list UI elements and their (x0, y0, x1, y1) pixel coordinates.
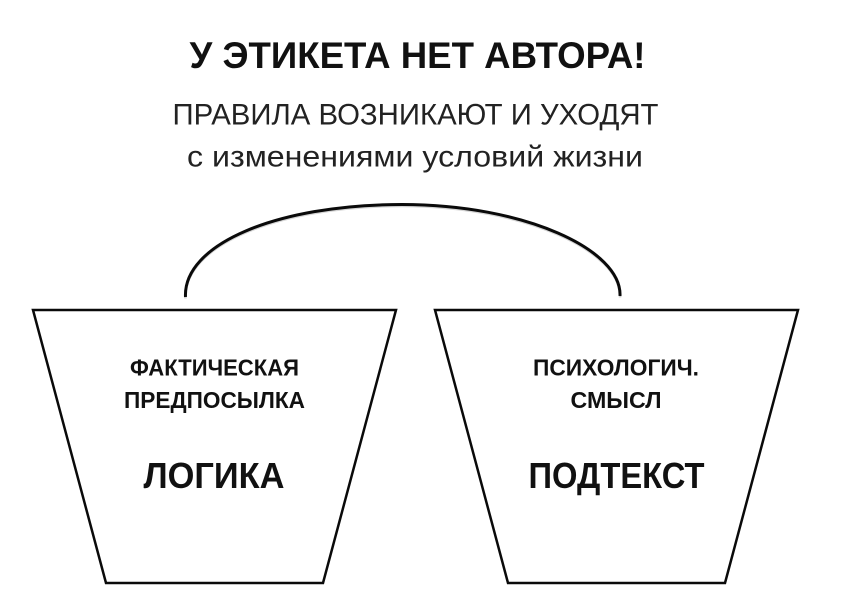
title: У ЭТИКЕТА НЕТ АВТОРА! (190, 34, 646, 76)
text: factual premise: ФАКТИЧЕСКАЯ (130, 354, 299, 380)
subtitle (172, 98, 658, 174)
subtitle: с изменениями условий жизни (187, 140, 643, 174)
text: psychological meaning (533, 354, 699, 413)
text: factual premise (124, 354, 305, 413)
connecting arc (185, 204, 620, 298)
panel: logic (33, 310, 396, 583)
text: psychological meaning: ПСИХОЛОГИЧ. (533, 354, 699, 380)
text: factual premise: ПРЕДПОСЫЛКА (124, 387, 305, 413)
text: subtext: ПОДТЕКСТ (528, 455, 705, 496)
panel: subtext (435, 310, 798, 583)
text: psychological meaning: СМЫСЛ (570, 387, 662, 413)
trapezoid: subtext (435, 310, 798, 583)
text: logic: ЛОГИКА (144, 455, 285, 496)
trapezoid: logic (33, 310, 396, 583)
subtitle: ПРАВИЛА ВОЗНИКАЮТ И УХОДЯТ (172, 98, 658, 132)
